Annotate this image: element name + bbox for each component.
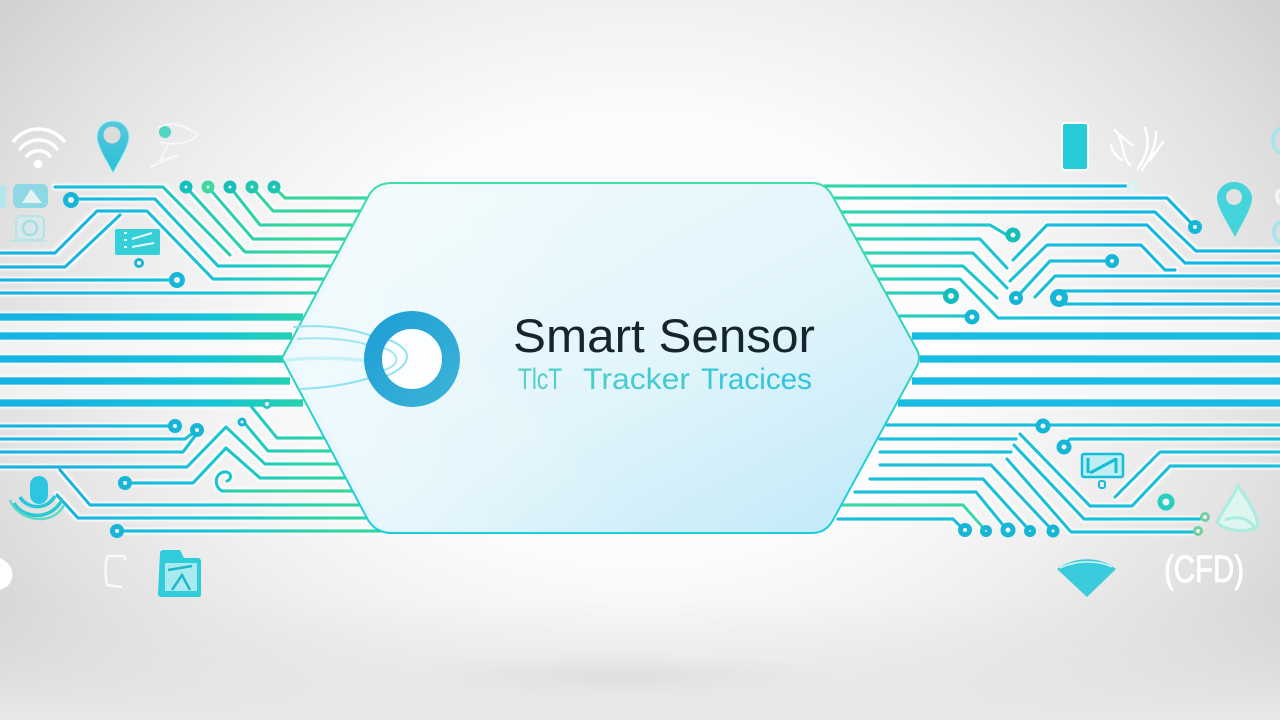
left circuit nodes [66,183,278,536]
icon: wifi [14,129,64,166]
subtitle: Tracker [583,363,690,396]
icon: location pin [97,121,129,173]
label: CFD: (CFD) [1164,549,1244,591]
subtitle [518,363,812,396]
right thick bus lines [898,336,1280,403]
title: Smart Sensor [513,309,815,362]
icon: small monitor upper left [115,229,160,255]
icon: right edge fragments [1273,128,1280,243]
icon: monitor lower right [1082,454,1123,488]
left thick bus lines [0,317,303,403]
icon: fan wifi [1057,559,1116,597]
subtitle: Tracices [701,363,812,396]
icon: top left device tiles [0,184,48,241]
upper right angled traces [825,186,1280,318]
icon: white phone outline [106,556,126,587]
upper left angled traces [0,187,368,293]
icon: lower left white blob [0,558,12,590]
right circuit traces [825,186,1280,532]
lower right angled traces [838,425,1280,532]
icon: folder [158,550,201,597]
central hexagon panel [282,183,919,533]
icon: pale flask [1217,486,1258,531]
icon: eye sketch [150,124,198,167]
icon: smartphone [1062,123,1088,170]
left circuit traces [0,187,380,531]
ring sensor icon [286,320,451,398]
icon: location pin right [1217,182,1252,237]
right circuit nodes [946,183,1208,535]
subtitle: TlcT [518,363,562,396]
lower left angled traces [0,405,380,531]
icon: white swirl [1111,128,1163,170]
icon: lower left wireless signal [10,476,64,519]
